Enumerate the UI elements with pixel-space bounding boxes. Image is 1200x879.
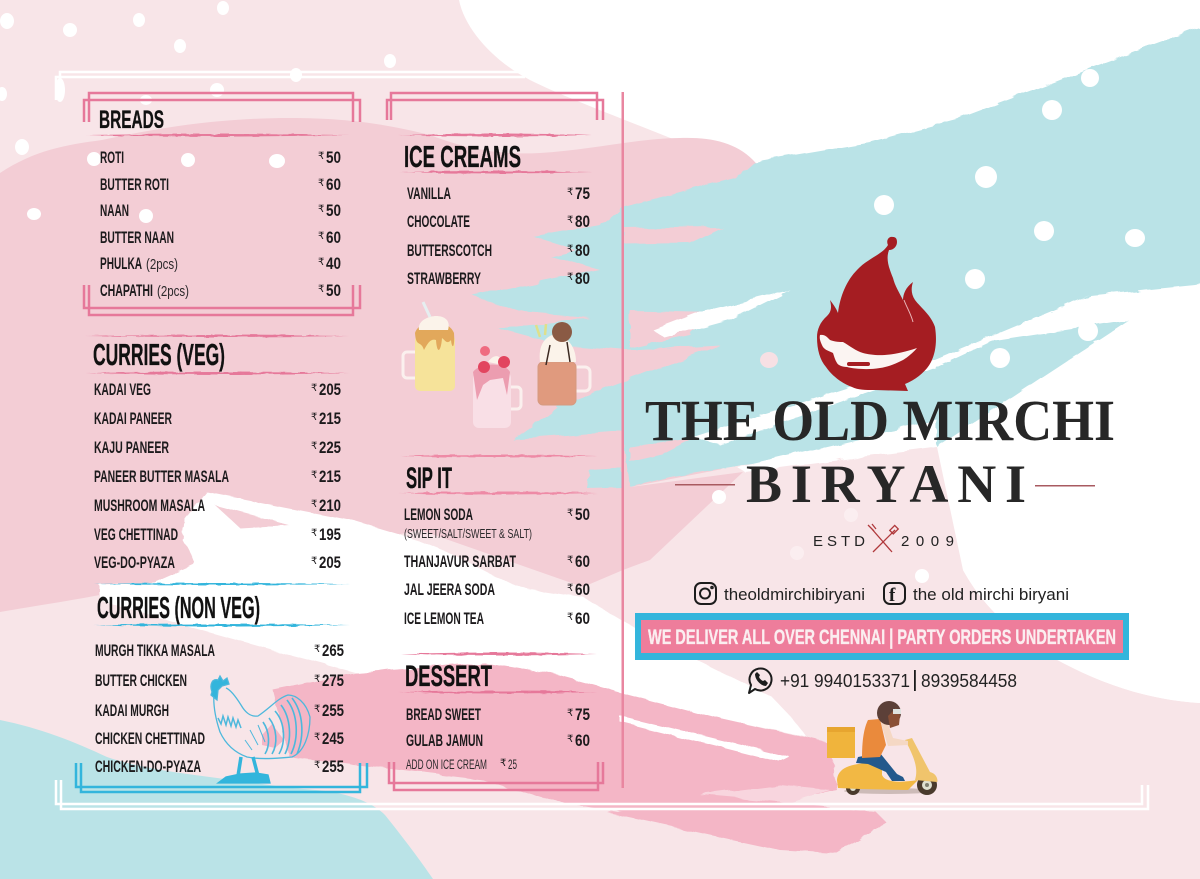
- non veg bottom rule: [93, 624, 350, 626]
- icon: crossed utensils: [868, 524, 898, 552]
- panel: ice creams: [387, 93, 603, 428]
- title side rules: [675, 484, 1095, 486]
- row: paneer butter masala: 215: [319, 468, 341, 486]
- row: chicken chettinad: CHICKEN CHETTINAD: [95, 730, 205, 748]
- row: ice lemon tea: 60: [575, 610, 590, 628]
- heading: curries veg: CURRIES (VEG): [93, 337, 225, 372]
- row: mushroom masala: MUSHROOM MASALA: [94, 497, 205, 515]
- row: kadai veg: ₹: [311, 383, 317, 394]
- row: kadai paneer: 215: [319, 410, 341, 428]
- row: phulka: [100, 255, 341, 273]
- row: chapathi: ₹: [318, 284, 324, 295]
- row: mushroom masala: 210: [319, 497, 341, 515]
- white brush: [100, 290, 937, 737]
- row: lemon soda: ₹: [567, 508, 573, 519]
- row: add on ice cream: ₹: [500, 758, 506, 769]
- white double frame: [56, 72, 1148, 809]
- heading: ice creams: ICE CREAMS: [404, 139, 521, 174]
- row: jal jeera soda: 60: [575, 581, 590, 599]
- row: lemon soda: [404, 506, 590, 541]
- row: chapathi: CHAPATHI: [100, 282, 153, 300]
- row: butter roti: BUTTER ROTI: [100, 176, 169, 194]
- icon: whatsapp: [749, 668, 772, 693]
- panel: curries veg: [85, 335, 350, 572]
- row: kadai paneer: ₹: [311, 412, 317, 423]
- row: roti: 50: [326, 149, 341, 167]
- row: naan: NAAN: [100, 202, 129, 220]
- white confetti dots: [0, 1, 1145, 583]
- row: butter chicken: [95, 672, 344, 690]
- row: phulka: 40: [326, 255, 341, 273]
- row: strawberry: ₹: [567, 272, 573, 283]
- row: chocolate: [407, 213, 590, 231]
- row: murgh tikka masala: MURGH TIKKA MASALA: [95, 642, 215, 660]
- curries veg top rule: [85, 335, 350, 337]
- icon: delivery scooter: [827, 701, 937, 795]
- row: vanilla: [407, 185, 590, 203]
- row: chicken do pyaza: [95, 758, 344, 776]
- row: phulka: (2pcs): [146, 256, 178, 273]
- icon: facebook: [884, 583, 905, 606]
- row: vanilla: VANILLA: [407, 185, 451, 203]
- row: chocolate: CHOCOLATE: [407, 213, 470, 231]
- row: gulab jamun: ₹: [567, 734, 573, 745]
- row: veg do pyaza: ₹: [311, 556, 317, 567]
- row: butterscotch: BUTTERSCOTCH: [407, 242, 492, 260]
- row: roti: ₹: [318, 151, 324, 162]
- row: veg do pyaza: 205: [319, 554, 341, 572]
- row: ice lemon tea: ICE LEMON TEA: [404, 610, 484, 628]
- row: veg chettinad: 195: [319, 526, 341, 544]
- row: kaju paneer: ₹: [311, 441, 317, 452]
- row: vanilla: 75: [575, 185, 590, 203]
- curries veg bottom rule: [85, 372, 350, 374]
- row: roti: [100, 149, 341, 167]
- row: bread sweet: [406, 706, 590, 724]
- row: roti: ROTI: [100, 149, 124, 167]
- row: naan: 50: [326, 202, 341, 220]
- dessert bracket: [389, 762, 603, 790]
- row: butter roti: ₹: [318, 178, 324, 189]
- row: lemon soda: (SWEET/SALT/SWEET & SALT): [404, 527, 532, 541]
- row: veg chettinad: [94, 526, 341, 544]
- row: butter chicken: BUTTER CHICKEN: [95, 672, 187, 690]
- heading: sip it: SIP IT: [406, 462, 452, 495]
- row: chicken do pyaza: ₹: [314, 760, 320, 771]
- icon: flame logo: [817, 237, 936, 391]
- row: butter naan: ₹: [318, 231, 324, 242]
- row: butterscotch: 80: [575, 242, 590, 260]
- row: thanjavur sarbat: 60: [575, 553, 590, 571]
- row: gulab jamun: [406, 732, 590, 750]
- row: kadai veg: 205: [319, 381, 341, 399]
- row: chicken do pyaza: CHICKEN-DO-PYAZA: [95, 758, 201, 776]
- row: thanjavur sarbat: ₹: [567, 555, 573, 566]
- row: butter roti: 60: [326, 176, 341, 194]
- row: add on ice cream: 25: [508, 757, 517, 772]
- row: ice lemon tea: ₹: [567, 612, 573, 623]
- row: phulka: PHULKA: [100, 255, 142, 273]
- row: kaju paneer: [94, 439, 341, 457]
- row: vanilla: ₹: [567, 187, 573, 198]
- panel: dessert: [389, 652, 603, 790]
- dessert top rule: [400, 652, 597, 656]
- column divider: [622, 92, 624, 788]
- row: naan: [100, 202, 341, 220]
- title line two: BIRYANI: [746, 454, 1026, 514]
- phone contact: [749, 668, 1017, 693]
- row: phulka: ₹: [318, 257, 324, 268]
- pink brush: [273, 662, 887, 853]
- row: thanjavur sarbat: THANJAVUR SARBAT: [404, 553, 516, 571]
- phone numbers: +91 9940153371: [780, 671, 910, 691]
- row: naan: ₹: [318, 204, 324, 215]
- row: lemon soda: 50: [575, 506, 590, 524]
- row: jal jeera soda: ₹: [567, 583, 573, 594]
- blue bracket: [76, 763, 367, 792]
- column two top bracket: [387, 93, 603, 120]
- delivery banner: [635, 613, 1129, 660]
- panel: breads: [84, 93, 360, 315]
- row: bread sweet: 75: [575, 706, 590, 724]
- facebook handle: the old mirchi biryani: [913, 586, 1069, 604]
- heading: breads: BREADS: [99, 106, 164, 134]
- row: veg do pyaza: VEG-DO-PYAZA: [94, 554, 175, 572]
- row: butter chicken: ₹: [314, 674, 320, 685]
- row: kadai murgh: [95, 702, 344, 720]
- title line one: THE OLD MIRCHI: [645, 388, 1115, 453]
- logo block: [645, 237, 1115, 552]
- row: paneer butter masala: ₹: [311, 470, 317, 481]
- second phone number: 8939584458: [921, 671, 1017, 691]
- dessert bottom rule: [398, 691, 597, 694]
- icon: rooster: [211, 676, 310, 783]
- row: lemon soda: LEMON SODA: [404, 506, 473, 524]
- icon: yellow shake: [403, 302, 455, 391]
- row: butterscotch: ₹: [567, 244, 573, 255]
- breads underline: [85, 134, 350, 136]
- row: butter roti: [100, 176, 341, 194]
- icon: chocolate shake: [536, 322, 590, 405]
- icon: white chilli: [820, 335, 917, 369]
- panel: curries non veg: [76, 583, 367, 792]
- row: bread sweet: ₹: [567, 708, 573, 719]
- row: murgh tikka masala: ₹: [314, 644, 320, 655]
- row: chapathi: (2pcs): [157, 283, 189, 300]
- row: chicken chettinad: 245: [322, 730, 344, 748]
- icon: facebook: f: [889, 585, 896, 606]
- social handles: [695, 583, 1069, 606]
- row: strawberry: 80: [575, 270, 590, 288]
- row: kaju paneer: KAJU PANEER: [94, 439, 169, 457]
- row: kadai paneer: KADAI PANEER: [94, 410, 172, 428]
- row: kadai murgh: KADAI MURGH: [95, 702, 169, 720]
- row: butter naan: BUTTER NAAN: [100, 229, 174, 247]
- sip it top rule: [400, 454, 597, 458]
- established date: [813, 524, 954, 552]
- row: chocolate: 80: [575, 213, 590, 231]
- row: chapathi: 50: [326, 282, 341, 300]
- ice creams top rule: [398, 134, 592, 136]
- icon: strawberry shake: [473, 346, 521, 428]
- heading: dessert: DESSERT: [405, 660, 492, 693]
- panel: sip it: [398, 454, 597, 628]
- instagram handle: theoldmirchibiryani: [724, 586, 865, 604]
- icon: milkshakes: [403, 302, 590, 428]
- row: add on ice cream: ADD ON ICE CREAM: [406, 757, 487, 772]
- established date: 2009: [901, 533, 954, 550]
- row: murgh tikka masala: 265: [322, 642, 344, 660]
- row: butter naan: 60: [326, 229, 341, 247]
- row: mushroom masala: ₹: [311, 499, 317, 510]
- row: kaju paneer: 225: [319, 439, 341, 457]
- row: strawberry: STRAWBERRY: [407, 270, 481, 288]
- row: kadai veg: KADAI VEG: [94, 381, 151, 399]
- row: veg do pyaza: [94, 554, 341, 572]
- row: kadai murgh: ₹: [314, 704, 320, 715]
- row: veg chettinad: VEG CHETTINAD: [94, 526, 178, 544]
- row: kadai veg: [94, 381, 341, 399]
- row: gulab jamun: GULAB JAMUN: [406, 732, 483, 750]
- row: bread sweet: BREAD SWEET: [406, 706, 481, 724]
- breads bracket: [84, 93, 360, 315]
- ice creams bottom rule: [398, 171, 592, 174]
- row: veg chettinad: ₹: [311, 528, 317, 539]
- non veg top rule: [93, 583, 350, 585]
- row: kadai murgh: 255: [322, 702, 344, 720]
- row: chicken do pyaza: 255: [322, 758, 344, 776]
- established date: ESTD: [813, 533, 865, 550]
- sip it bottom rule: [398, 492, 597, 494]
- row: ice lemon tea: [404, 610, 590, 628]
- row: butter naan: [100, 229, 341, 247]
- heading: curries non veg: CURRIES (NON VEG): [97, 590, 260, 625]
- icon: instagram: [695, 583, 716, 604]
- blue brush: [473, 15, 1200, 488]
- row: chapathi: [100, 282, 341, 300]
- row: kadai paneer: [94, 410, 341, 428]
- row: jal jeera soda: JAL JEERA SODA: [404, 581, 495, 599]
- row: gulab jamun: 60: [575, 732, 590, 750]
- row: paneer butter masala: PANEER BUTTER MASALA: [94, 468, 229, 486]
- row: chicken chettinad: ₹: [314, 732, 320, 743]
- row: chocolate: ₹: [567, 215, 573, 226]
- row: butter chicken: 275: [322, 672, 344, 690]
- row: strawberry: [407, 270, 590, 288]
